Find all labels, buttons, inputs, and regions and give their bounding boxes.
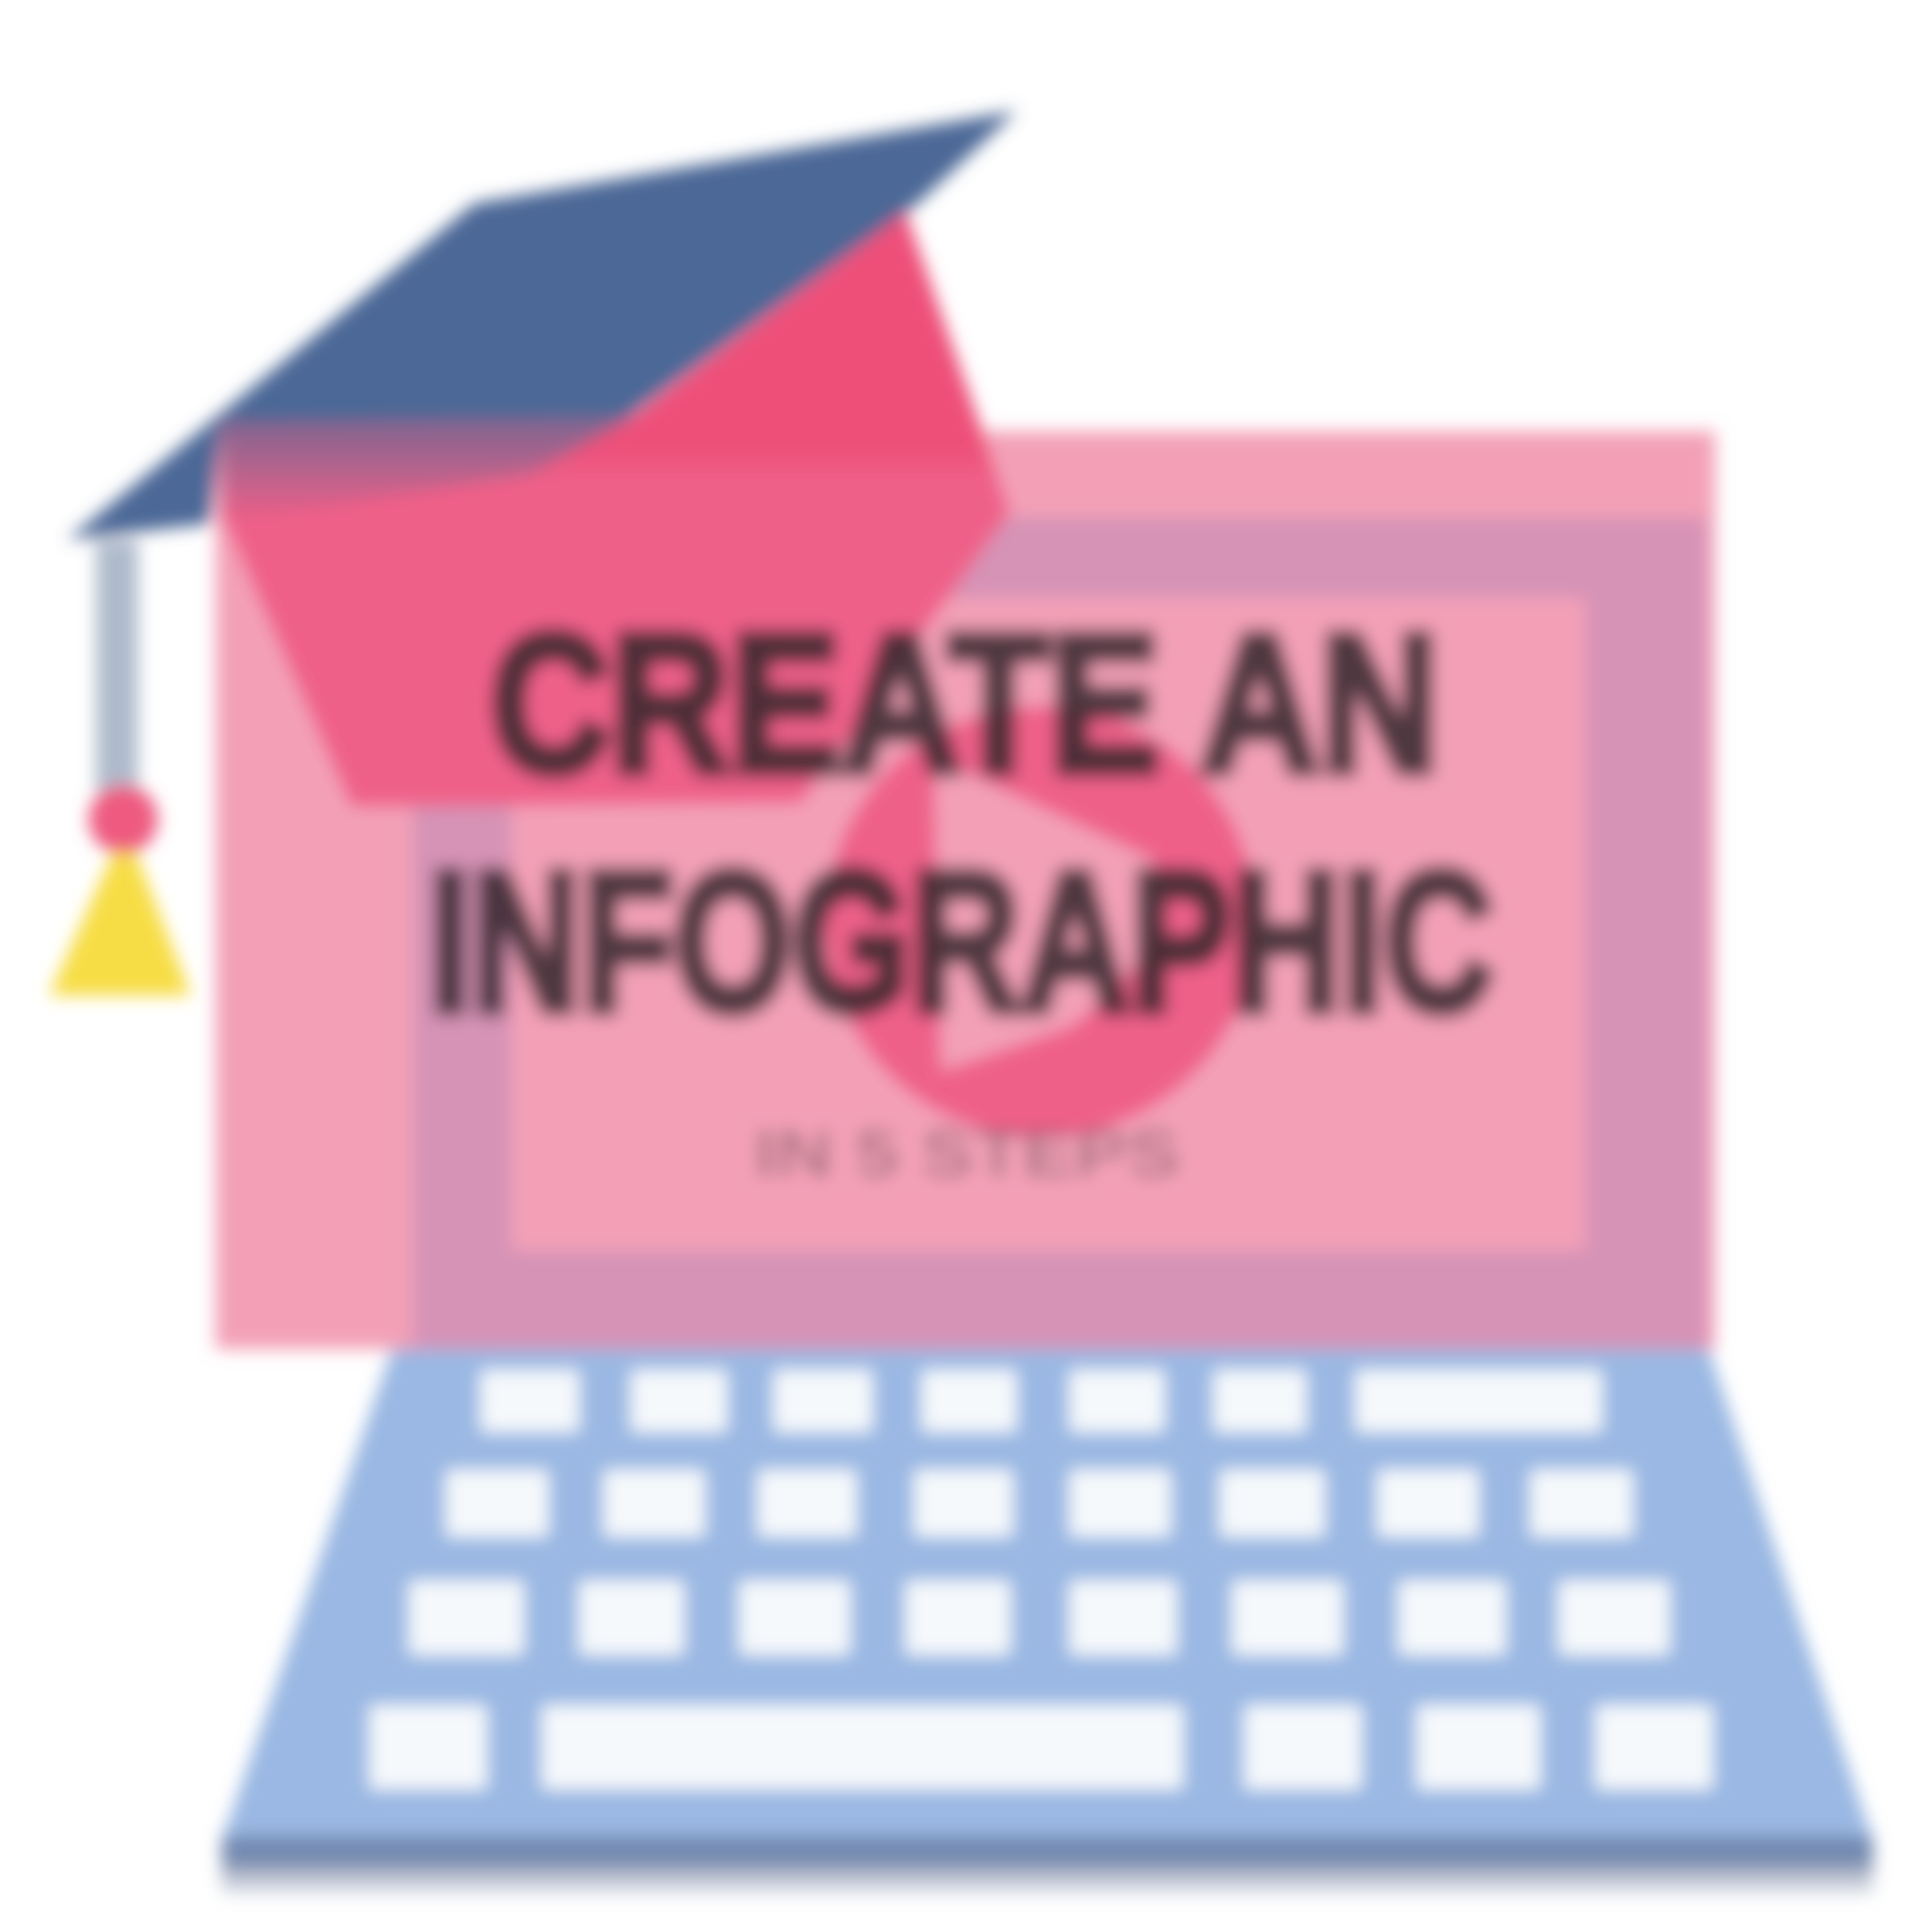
play button icon bbox=[826, 706, 1257, 1137]
title bbox=[429, 592, 1493, 1053]
tassel fringe bbox=[49, 852, 191, 996]
laptop keyboard deck bbox=[222, 1343, 1873, 1841]
cap board bbox=[68, 111, 1017, 539]
cap board shading bbox=[222, 416, 634, 524]
tassel cord bbox=[96, 539, 138, 792]
laptop screen bezel bbox=[413, 518, 1707, 1349]
keyboard keys bbox=[369, 1370, 1713, 1789]
laptop screen back panel bbox=[216, 431, 1715, 1349]
graduation cap bbox=[49, 111, 1017, 996]
title line 2: INFOGRAPHIC bbox=[429, 830, 1493, 1053]
cap underside bbox=[225, 212, 1010, 807]
subtitle: IN 5 STEPS bbox=[754, 1116, 1180, 1191]
laptop screen display bbox=[511, 597, 1586, 1251]
tassel knot bbox=[89, 785, 158, 854]
laptop base edge bbox=[222, 1836, 1873, 1893]
title line 1: CREATE AN bbox=[490, 592, 1439, 813]
